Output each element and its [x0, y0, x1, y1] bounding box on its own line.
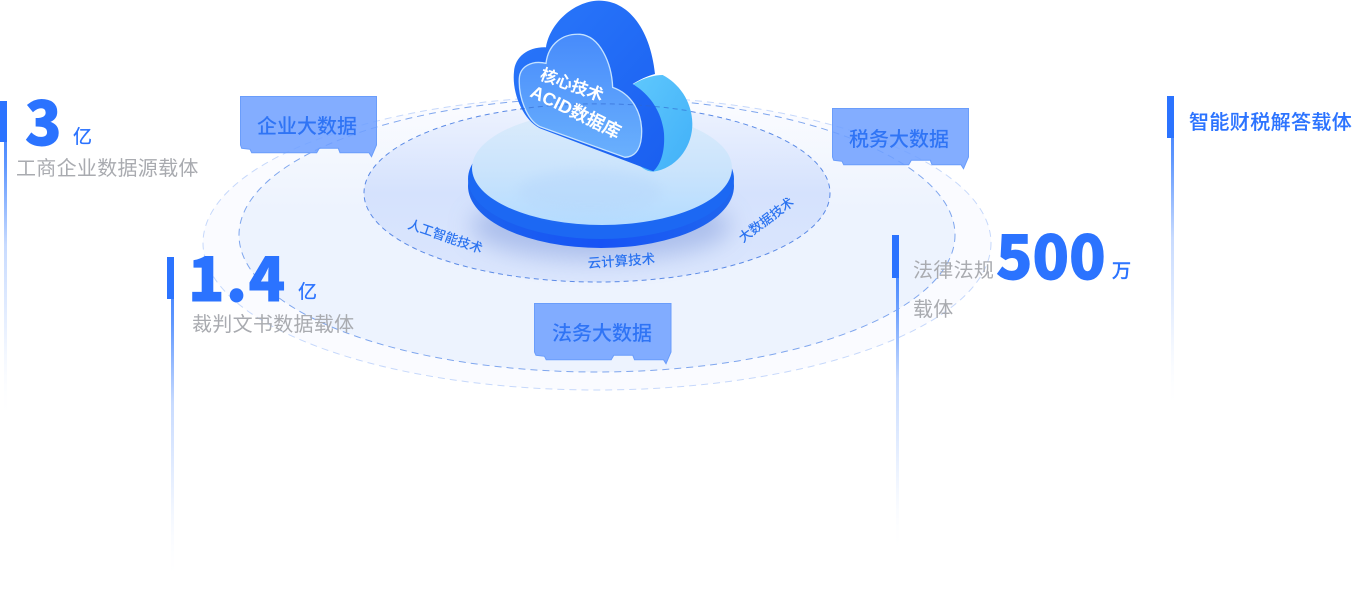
tag: tax big data: 税务大数据 — [849, 128, 949, 151]
stat: 1.4亿 — [167, 232, 354, 582]
stat: tax answers — [1167, 96, 1352, 411]
tag: legal big data — [534, 304, 671, 364]
disk shadow — [471, 192, 731, 260]
stat: 3亿: 3 — [25, 76, 62, 163]
platform rings — [203, 96, 991, 390]
stat: 1.4亿: 1.4 — [188, 232, 287, 319]
tag: legal big data: 法务大数据 — [552, 322, 652, 345]
label: AI technology: 人工智能技术 — [406, 217, 485, 256]
icon: cloud — [514, 1, 692, 172]
stat: tax answers: 智能财税解答载体 — [1189, 111, 1352, 134]
label: cloud computing: 云计算技术 — [587, 250, 656, 271]
stat: 500万: 500 — [996, 210, 1106, 297]
label: big data technology: 大数据技术 — [736, 194, 797, 245]
disk pedestal — [468, 111, 734, 248]
tag: enterprise big data: 企业大数据 — [257, 115, 357, 138]
stat: 3亿: 工商企业数据源载体 — [16, 157, 199, 180]
cloud label: ACID database: ACID数据库 — [527, 82, 624, 143]
stat: 500万: 万 — [1112, 261, 1131, 282]
cloud label: core technology: 核心技术 — [538, 64, 607, 106]
tag: enterprise big data — [240, 96, 376, 157]
stat: 1.4亿: 裁判文书数据载体 — [192, 313, 354, 336]
stat: 500万: 法律法规 — [913, 259, 994, 282]
stat: 3亿 — [0, 76, 199, 421]
stat: 3亿: 亿 — [73, 126, 92, 148]
stat: 500万 — [892, 210, 1131, 555]
stat: 500万: 载体 — [913, 298, 954, 321]
tag: tax big data — [832, 108, 968, 169]
stat: 1.4亿: 亿 — [298, 281, 317, 303]
